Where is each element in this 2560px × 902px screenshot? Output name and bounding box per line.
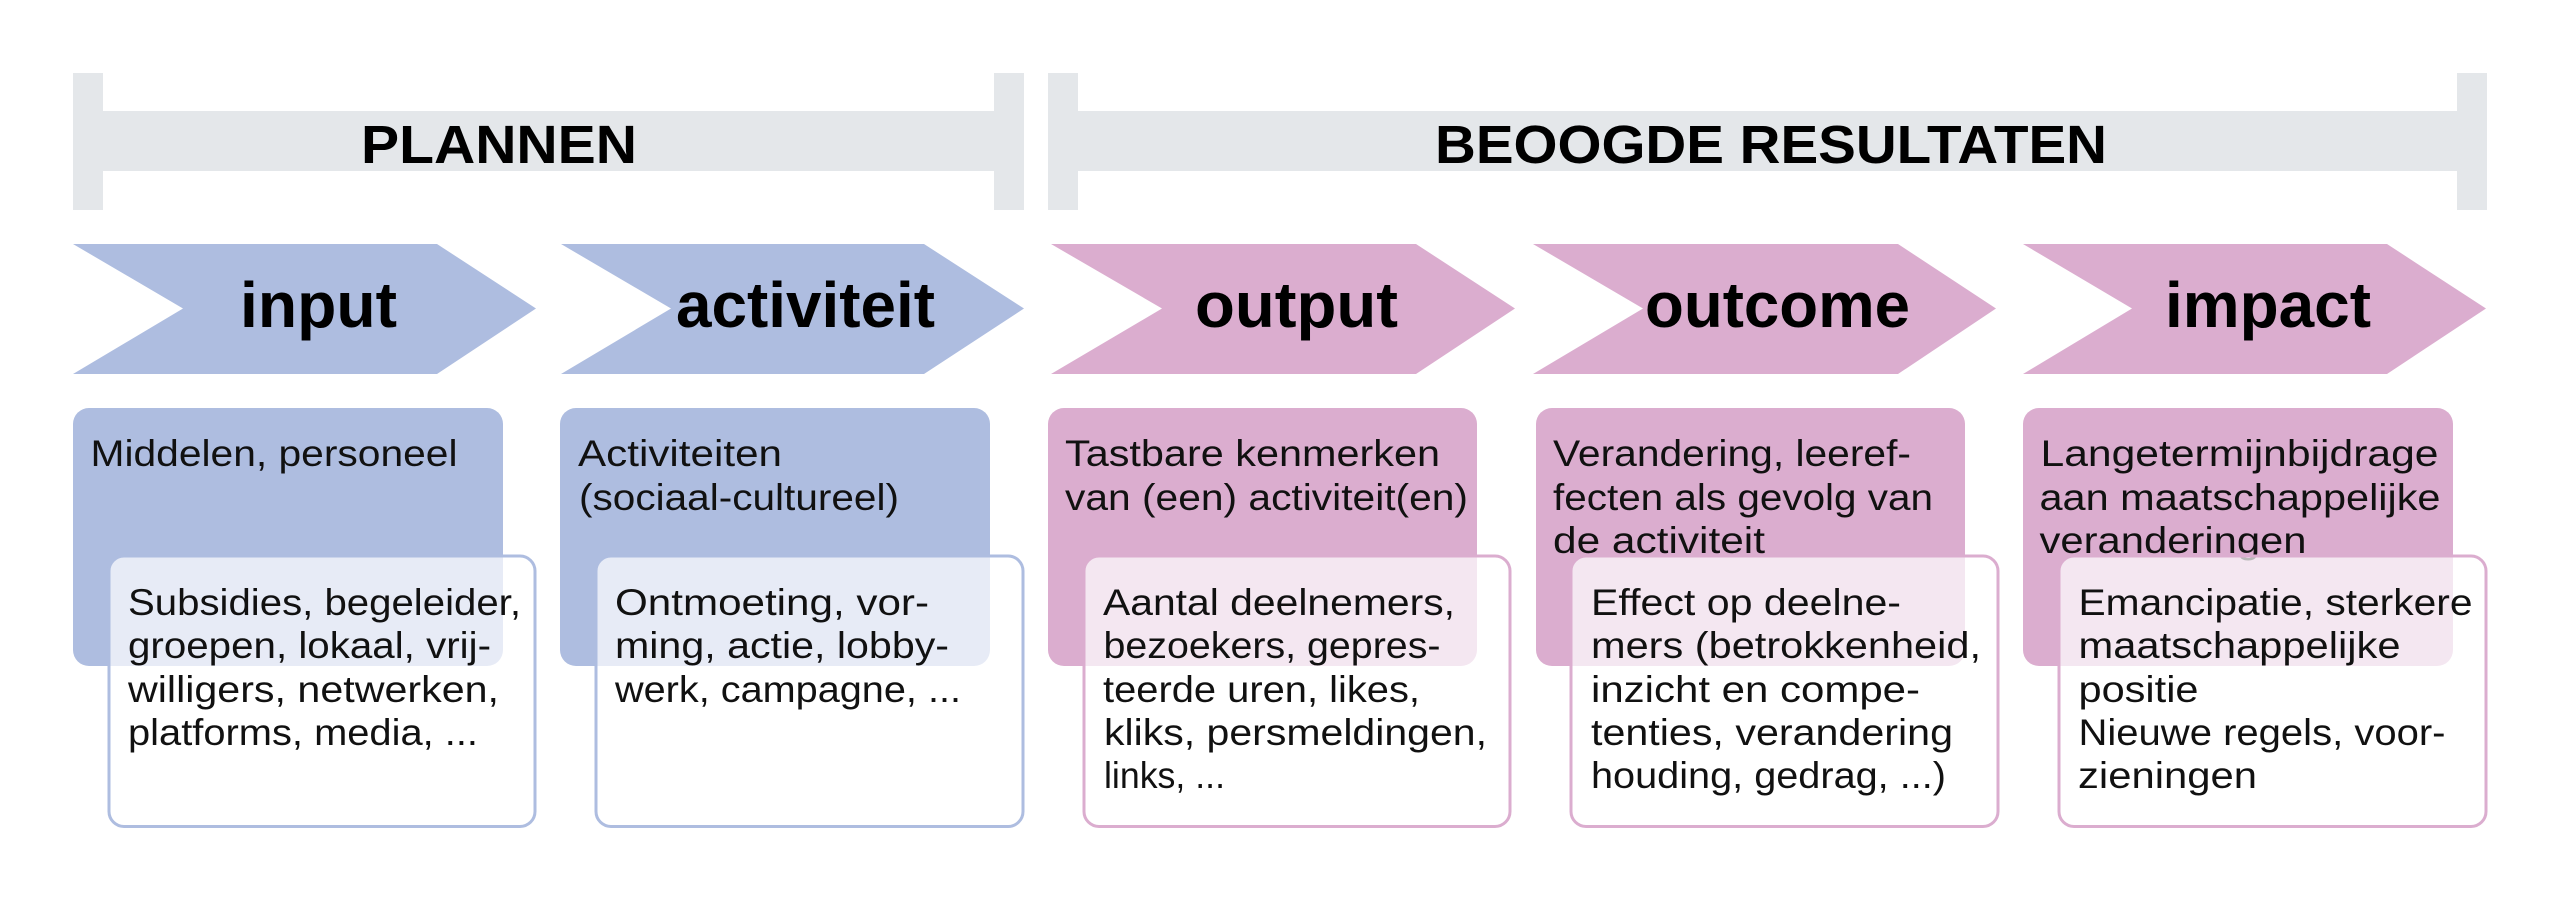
definition box: output: van (een) activiteit(en) xyxy=(1065,477,1468,518)
definition box: impact: aan maatschappelijke xyxy=(2040,477,2440,518)
examples box: output xyxy=(1084,556,1510,826)
examples box: outcome xyxy=(1571,556,1998,826)
arrow: impact xyxy=(2023,244,2486,374)
examples box: input: groepen, lokaal, vrij- xyxy=(128,625,491,666)
definition box: outcome: fecten als gevolg van xyxy=(1553,477,1933,518)
examples box: activiteit: Ontmoeting, vor- xyxy=(615,582,929,623)
definition box: activiteit: Activiteiten xyxy=(578,433,782,474)
arrow: outcome xyxy=(1533,244,1996,374)
examples box: input: platforms, media, ... xyxy=(128,712,478,753)
definition box: output: Tastbare kenmerken xyxy=(1065,433,1440,474)
examples box: impact xyxy=(2059,556,2486,826)
examples box: impact: Emancipatie, sterkere xyxy=(2078,582,2472,623)
definition box: outcome: de activiteit xyxy=(1553,520,1766,561)
examples box: outcome: tenties, verandering xyxy=(1591,712,1953,753)
heading: beoogde resultaten: BEOOGDE RESULTATEN xyxy=(1435,115,2107,175)
definition box: activiteit: (sociaal-cultureel) xyxy=(579,477,899,518)
examples box: output: kliks, persmeldingen, xyxy=(1104,712,1487,753)
examples box: impact: Nieuwe regels, voor- xyxy=(2078,712,2446,753)
examples box: outcome: mers (betrokkenheid, xyxy=(1591,625,1981,666)
definition box: impact: veranderingen xyxy=(2040,520,2306,561)
examples box: impact: maatschappelijke xyxy=(2078,625,2400,666)
examples box: output: teerde uren, likes, xyxy=(1103,669,1420,710)
examples box: outcome: inzicht en compe- xyxy=(1591,669,1920,710)
panel: output definition and examples xyxy=(1048,408,1510,826)
definition box: activiteit xyxy=(560,408,990,666)
arrow: input: input xyxy=(240,269,397,341)
definition box: impact xyxy=(2023,408,2453,666)
arrow: output xyxy=(1051,244,1515,374)
examples box: input: willigers, netwerken, xyxy=(127,669,499,710)
arrow: impact: impact xyxy=(2165,269,2371,341)
examples box: impact: zieningen xyxy=(2078,755,2257,796)
definition box: output xyxy=(1048,408,1477,666)
examples box: output: bezoekers, gepres- xyxy=(1104,625,1440,666)
examples box: outcome: houding, gedrag, ...) xyxy=(1591,755,1946,796)
arrow: output: output xyxy=(1195,269,1398,341)
definition box: input: Middelen, personeel xyxy=(90,433,458,474)
examples box: input: Subsidies, begeleider, xyxy=(128,582,521,623)
definition box: outcome: Verandering, leeref- xyxy=(1553,433,1911,474)
panel: input definition and examples xyxy=(73,408,535,826)
examples box: output: links, ... xyxy=(1104,755,1225,796)
examples box: outcome: Effect op deelne- xyxy=(1591,582,1901,623)
arrow: activiteit: activiteit xyxy=(676,269,935,341)
panel: beoogde resultaten bracket header xyxy=(1048,73,2487,210)
examples box: impact: positie xyxy=(2078,669,2198,710)
arrow: outcome: outcome xyxy=(1645,269,1910,341)
panel: activiteit definition and examples xyxy=(560,408,1023,826)
panel: impact definition and examples xyxy=(2023,408,2486,826)
panel: outcome definition and examples xyxy=(1536,408,1998,826)
examples box: output: Aantal deelnemers, xyxy=(1103,582,1455,623)
arrow: input xyxy=(73,244,536,374)
examples box: activiteit: werk, campagne, ... xyxy=(614,669,961,710)
arrow: activiteit xyxy=(561,244,1024,374)
panel: plannen bracket header xyxy=(73,73,1024,210)
definition box: impact: Langetermijnbijdrage xyxy=(2040,433,2438,474)
definition box: input xyxy=(73,408,503,666)
examples box: input xyxy=(109,556,535,826)
heading: plannen: PLANNEN xyxy=(361,115,637,175)
examples box: activiteit xyxy=(596,556,1023,826)
examples box: activiteit: ming, actie, lobby- xyxy=(615,625,949,666)
definition box: outcome xyxy=(1536,408,1965,666)
